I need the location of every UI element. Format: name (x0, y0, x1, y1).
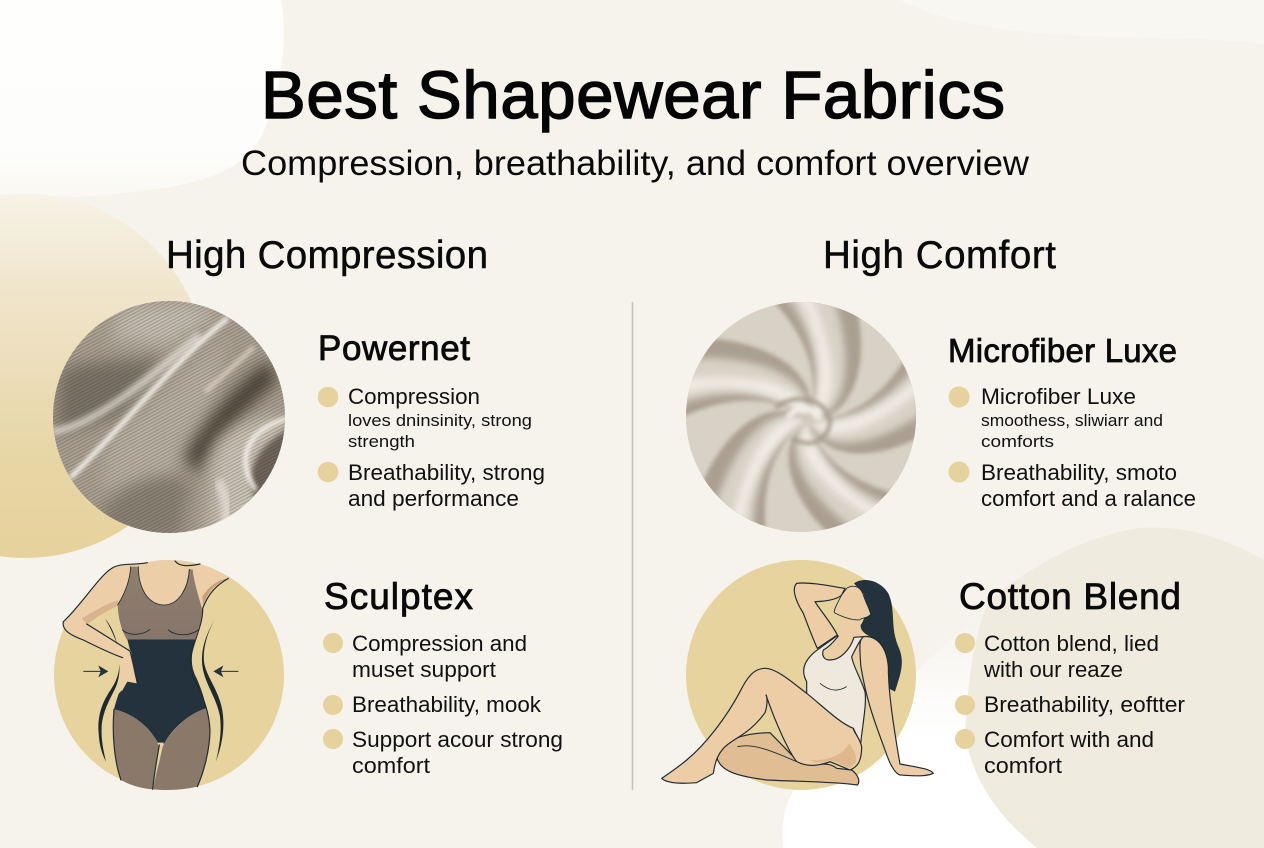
bullet text: muset support (352, 657, 496, 682)
bullet text: Compression (348, 384, 480, 409)
image: powernet fabric (50, 300, 290, 540)
bullet text (348, 384, 545, 511)
bullet text (981, 384, 1196, 511)
heading: Microfiber Luxe (948, 332, 1177, 369)
bullet text: Support acour strong (352, 727, 563, 752)
panel: sculptex (54, 560, 563, 790)
bullet text (983, 631, 1185, 778)
heading: high comfort: High Comfort (823, 234, 1056, 277)
bullet text: and performance (348, 486, 519, 511)
bullet text: comfort (352, 753, 430, 778)
subtitle: Compression, breathability, and comfort overview (241, 144, 1030, 183)
bullet text: Comfort with and (984, 727, 1154, 752)
heading: Cotton Blend (959, 576, 1181, 617)
icon: left arrow (83, 667, 107, 676)
bullet icons (318, 387, 338, 482)
heading: high compression: High Compression (166, 234, 488, 277)
bullet icons (323, 633, 343, 749)
heading: Sculptex (324, 576, 474, 617)
bullet text: loves dninsinity, strong (348, 411, 532, 430)
bullet text: Microfiber Luxe (981, 384, 1136, 409)
bullet text: strength (348, 432, 415, 451)
bullet text: Cotton blend, lied (984, 631, 1159, 656)
title: Best Shapewear Fabrics (261, 58, 1005, 133)
bullet text (352, 631, 563, 778)
illustration: shapewear figure (54, 560, 284, 790)
bullet text: Compression and (352, 631, 527, 656)
panel: microfiber luxe (686, 302, 1195, 532)
illustration: reclining woman (662, 560, 933, 790)
decorative gold blob (0, 194, 207, 558)
bullet text: comfort and a ralance (981, 486, 1196, 511)
bullet text: Breathability, mook (352, 692, 542, 717)
panel: cotton blend (662, 560, 1185, 790)
bullet text: comfort (984, 753, 1062, 778)
bullet text: Breathability, strong (348, 460, 545, 485)
bullet text: smoothess, sliwiarr and (981, 411, 1163, 430)
bullet text: Breathability, smoto (981, 460, 1177, 485)
bullet text: with our reaze (983, 657, 1123, 682)
panel: powernet (50, 300, 545, 540)
bullet text: Breathability, eoftter (984, 692, 1185, 717)
bullet text: comforts (981, 432, 1054, 451)
bullet icons (948, 386, 970, 482)
bullet icons (955, 633, 975, 749)
heading: Powernet (318, 329, 470, 368)
icon: right arrow (214, 667, 238, 676)
image: microfiber swirl (686, 302, 916, 532)
